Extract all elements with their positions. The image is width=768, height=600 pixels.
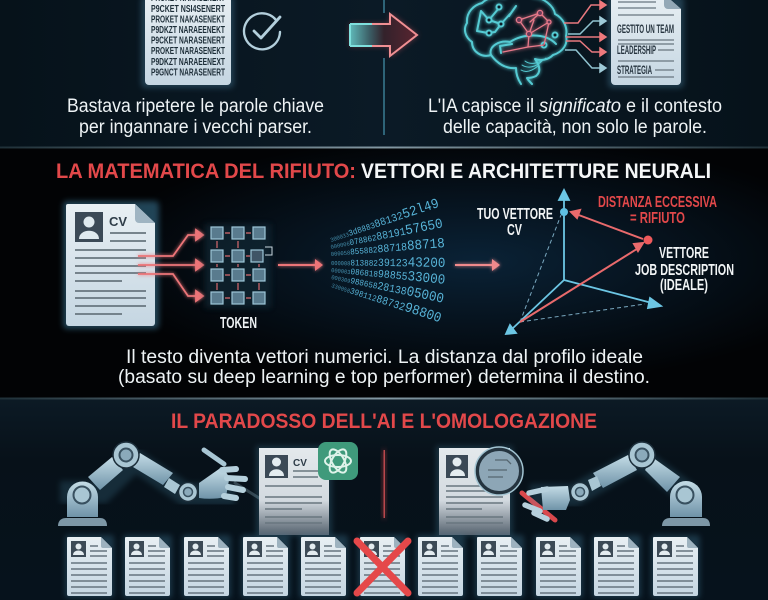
semantic resume document <box>608 0 684 88</box>
vector number field <box>327 196 446 326</box>
document with repeated keywords: P9GNCT NARASENERT <box>151 68 225 78</box>
label: vettore job description: (IDEALE) <box>660 277 708 294</box>
caption: vectors determine destiny: Il testo diventa vettori numerici. La distanza dal profilo ideale <box>126 347 643 368</box>
axes <box>506 190 661 334</box>
panel: AI semantic understanding <box>428 0 722 138</box>
vector number field: 0003099886582813805000 <box>330 268 445 307</box>
panel: AI writes CV <box>58 442 358 536</box>
vector number field: 3000333d88838813252l49 <box>327 196 441 246</box>
point: job description vector <box>644 236 652 244</box>
background: middle section <box>0 149 768 398</box>
label: distanza eccessiva: DISTANZA ECCESSIVA <box>598 194 717 211</box>
heading: AI paradox: IL PARADOSSO DELL'AI E L'OMOLOGAZIONE <box>171 410 597 433</box>
vector number field: 3300583981128873298800 <box>330 276 443 326</box>
document with repeated keywords: PROKET NARASENEKT <box>151 46 225 57</box>
label: token: TOKEN <box>220 315 257 332</box>
vector number field: 0000030868189885533000 <box>331 261 446 288</box>
caption: semantic understanding <box>428 96 722 138</box>
vector number field: 0000088138823912343200 <box>331 253 446 271</box>
semantic resume document: STRATEGIA <box>617 63 652 77</box>
caption: old parsers <box>67 96 324 138</box>
semantic resume document: LEADERSHIP <box>617 43 656 57</box>
arrow to vector space <box>455 259 500 271</box>
background: top section <box>0 0 768 148</box>
document with repeated keywords: P9DKZT NARAEENEXT <box>151 57 225 68</box>
red vectors <box>520 210 643 322</box>
panel: old parser keyword stuffing <box>67 0 324 138</box>
caption: semantic understanding: significato <box>539 96 621 117</box>
token grid <box>205 224 272 308</box>
label: tuo vettore: TUO VETTORE <box>477 206 553 223</box>
panel: AI detects CV <box>436 442 710 536</box>
CV document <box>63 201 159 329</box>
label: vettore job description: VETTORE <box>659 245 709 262</box>
document with repeated keywords <box>141 0 234 88</box>
label: vettore job description <box>635 245 734 294</box>
icon: red cross <box>357 541 408 593</box>
arrow to vectors <box>278 259 323 271</box>
caption: semantic understanding: L'IA capisce il <box>428 96 534 117</box>
label: distanza eccessiva: = RIFIUTO <box>630 210 685 227</box>
caption: semantic understanding: e il contesto <box>626 96 722 117</box>
label: tuo vettore: CV <box>507 222 522 239</box>
dashed guides <box>520 215 645 322</box>
robot arm inspecting <box>525 442 710 526</box>
vector number field: 0000588558828871888718 <box>330 236 445 260</box>
row of identical CVs <box>65 535 700 598</box>
caption: vectors determine destiny <box>118 347 650 388</box>
panel: CV to tokens to vectors <box>63 196 500 332</box>
robot arm writing <box>58 442 259 526</box>
icon: magnifying glass <box>475 447 555 520</box>
document with repeated keywords: P9DKZT NARAEENEKT <box>151 25 225 36</box>
caption: semantic understanding: delle capacità, non solo le parole. <box>443 117 707 138</box>
icon: neural brain <box>465 0 566 84</box>
arrows from CV to tokens <box>138 230 203 301</box>
caption: old parsers: per ingannare i vecchi parser. <box>79 117 312 138</box>
AI generated CV: CV <box>293 458 307 469</box>
chart: 3D vector space <box>477 190 734 334</box>
divider and transition arrow <box>350 0 418 135</box>
CV document: CV <box>109 214 127 229</box>
semantic resume document: GESTITO UN TEAM <box>617 22 674 36</box>
heading: mathematics of rejection: VETTORI E ARCHITETTURE NEURALI <box>361 160 711 183</box>
document with repeated keywords: P9CKET NSI4SENERT <box>151 4 225 15</box>
icon: check mark <box>244 13 280 49</box>
connector arrows to document <box>564 1 606 72</box>
vector number field: 0000060788628819157650 <box>329 216 444 253</box>
label: tuo vettore <box>477 206 553 239</box>
heading: mathematics of rejection <box>56 160 711 183</box>
document with repeated keywords: P9CKET NARASENERT <box>151 36 225 46</box>
icon: chatbot logo <box>318 442 358 480</box>
heading: mathematics of rejection: LA MATEMATICA DEL RIFIUTO: <box>56 160 356 183</box>
caption: old parsers: Bastava ripetere le parole chiave <box>67 96 324 117</box>
document with repeated keywords: PROKET NAKASENEKT <box>151 14 225 26</box>
background: bottom section <box>0 399 768 600</box>
inspected CV <box>436 446 513 536</box>
point: CV vector <box>560 208 568 216</box>
AI generated CV <box>256 446 332 536</box>
label: distanza eccessiva <box>598 194 717 227</box>
caption: vectors determine destiny: (basato su deep learning e top performer) determina il destino. <box>118 367 650 388</box>
divider between robots <box>382 450 386 518</box>
